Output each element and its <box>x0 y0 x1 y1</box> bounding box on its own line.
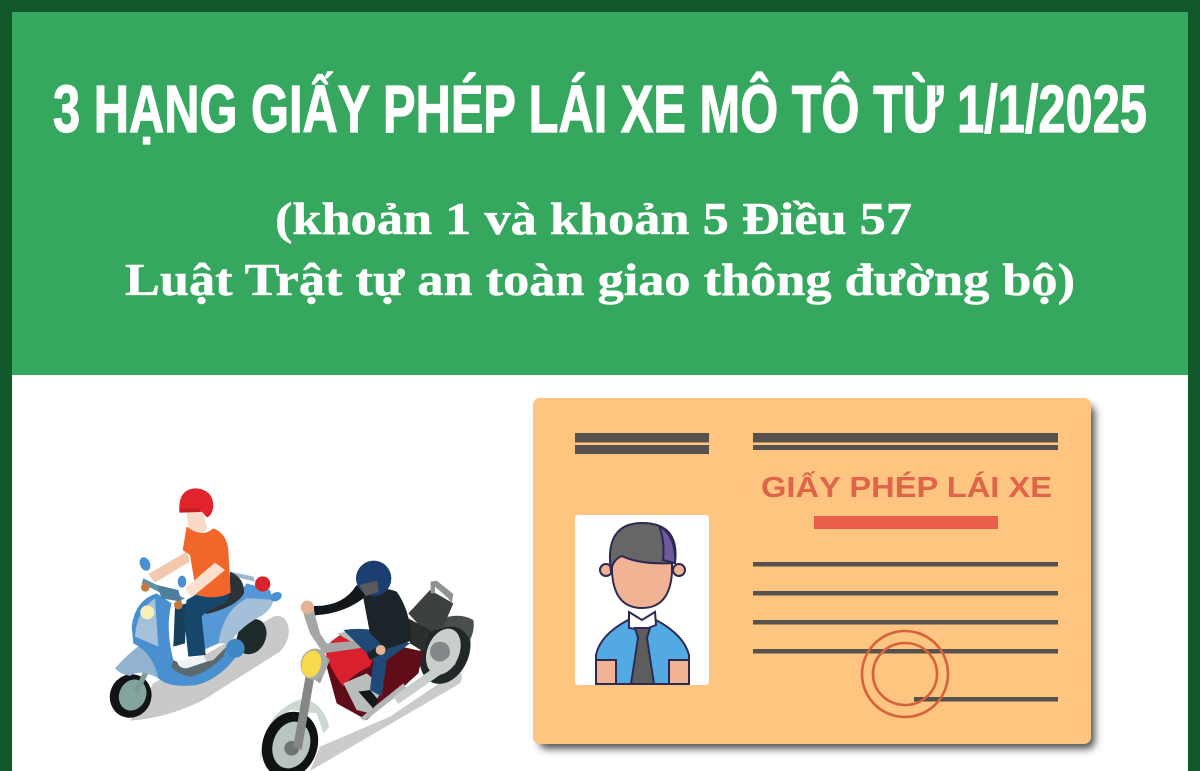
subtitle <box>125 193 1075 305</box>
motorcycle rider <box>301 561 412 708</box>
scooter with rider <box>103 488 289 725</box>
subtitle: Luật Trật tự an toàn giao thông đường bộ) <box>125 254 1075 305</box>
portrait photo <box>575 515 709 685</box>
licence card <box>533 398 1095 749</box>
red underline <box>814 516 998 529</box>
text lines <box>753 562 1058 702</box>
scooter rider <box>148 488 231 668</box>
white lower panel <box>12 375 1188 771</box>
header bars left <box>575 433 709 454</box>
stamp <box>862 631 948 717</box>
card title: GIẤY PHÉP LÁI XE <box>761 470 1052 504</box>
illustration: motorbike riders <box>103 488 480 771</box>
motorcycle with rider <box>253 561 480 771</box>
subtitle: (khoản 1 và khoản 5 Điều 57 <box>275 193 912 244</box>
header bars right <box>753 433 1058 450</box>
panel: green header <box>12 12 1188 375</box>
